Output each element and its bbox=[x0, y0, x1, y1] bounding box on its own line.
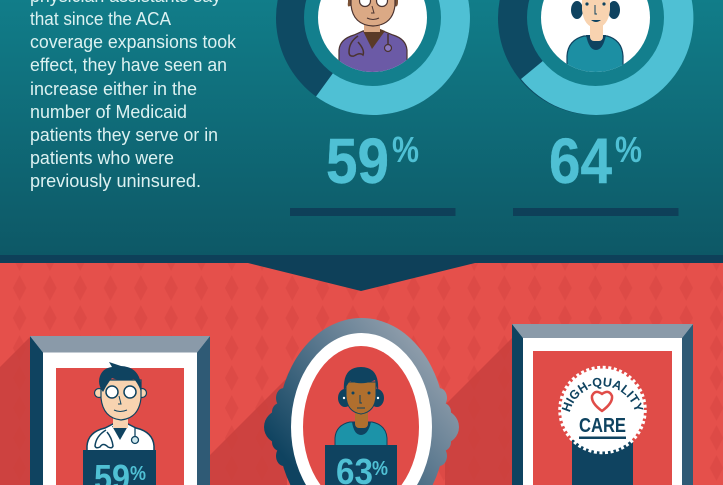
badge: high-quality care: HIGH-QUALITY bbox=[562, 378, 644, 412]
panel: centre oval mirror frame bbox=[264, 318, 459, 485]
panel: right portrait frame bbox=[512, 324, 693, 485]
label plate: 59% bbox=[83, 450, 156, 485]
label plate: 63%: % bbox=[372, 458, 388, 480]
body text: previously uninsured. bbox=[30, 171, 201, 191]
bar placeholder bbox=[513, 208, 678, 216]
panel: teal upper section bbox=[0, 0, 723, 256]
body text: number of Medicaid bbox=[30, 102, 187, 122]
icon: woman in teal top bbox=[335, 367, 387, 446]
donut chart: physician assistants 59% bbox=[276, 0, 470, 197]
stat: 59%: % bbox=[392, 129, 419, 170]
body text: coverage expansions took bbox=[30, 32, 237, 52]
ribbon bbox=[572, 440, 633, 485]
panel: red lower section with diamond pattern bbox=[0, 263, 723, 485]
arrow: dark band pointing down bbox=[0, 255, 723, 291]
body text: that since the ACA bbox=[30, 9, 171, 29]
body text: patients they serve or in bbox=[30, 125, 218, 145]
badge: high-quality care: CARE bbox=[579, 415, 626, 437]
donut chart: nurse practitioners 64% bbox=[498, 0, 693, 197]
stat: 64%: 64 bbox=[549, 125, 612, 197]
label plate: 59%: % bbox=[130, 463, 146, 485]
body text: patients who were bbox=[30, 148, 174, 168]
body text bbox=[30, 0, 237, 191]
badge: high-quality care bbox=[558, 366, 647, 454]
stat: 64%: % bbox=[615, 129, 642, 170]
icon: doctor in white coat bbox=[87, 362, 154, 452]
label plate: 63% bbox=[325, 445, 397, 485]
icon: physician assistant in purple scrubs bbox=[339, 0, 407, 74]
body text: increase either in the bbox=[30, 79, 197, 99]
stat: 59%: 59 bbox=[326, 125, 389, 197]
icon: nurse practitioner in teal top bbox=[567, 0, 623, 74]
bar placeholder bbox=[290, 208, 456, 216]
body text: effect, they have seen an bbox=[30, 55, 227, 75]
panel: left portrait frame bbox=[30, 336, 210, 485]
